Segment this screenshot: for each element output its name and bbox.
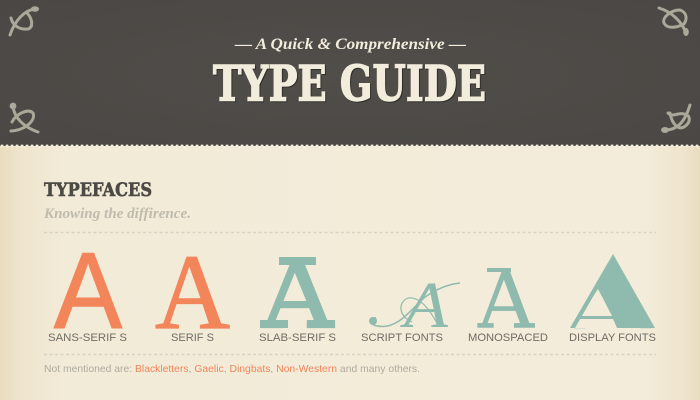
letter: display: A xyxy=(574,248,652,348)
letter: slab-serif: A xyxy=(261,241,334,350)
icon: ornament top right xyxy=(659,8,689,36)
label: slab-serif: SLAB-SERIF S xyxy=(259,332,336,344)
subtitle: — A Quick & Comprehensive — xyxy=(234,36,467,53)
letter: script xyxy=(369,269,460,342)
heading: typefaces: TYPEFACES xyxy=(44,180,152,201)
label: serif: SERIF S xyxy=(171,332,214,344)
letter: sans-serif: A xyxy=(54,230,122,350)
title: TYPE GUIDE xyxy=(214,56,487,114)
label: display: DISPLAY FONTS xyxy=(569,332,656,344)
letter: serif: A xyxy=(155,234,230,352)
icon: ornament bottom left xyxy=(10,103,38,132)
label: script: SCRIPT FONTS xyxy=(361,332,443,344)
icon: ornament bottom right xyxy=(661,105,690,133)
icon: ornament top left xyxy=(10,6,39,35)
label: monospaced: MONOSPACED xyxy=(468,332,548,344)
letter: monospaced: A xyxy=(477,254,535,346)
letter: script: A xyxy=(400,269,449,342)
subheading: Knowing the diffirence. xyxy=(43,206,191,222)
label: sans-serif: SANS-SERIF S xyxy=(48,332,127,344)
title: TYPE GUIDE xyxy=(213,54,486,112)
footer note: Not mentioned are: Blackletters, Gaelic, Dingbats, Non-Western and many others. xyxy=(44,363,420,375)
panel: header xyxy=(0,0,700,146)
